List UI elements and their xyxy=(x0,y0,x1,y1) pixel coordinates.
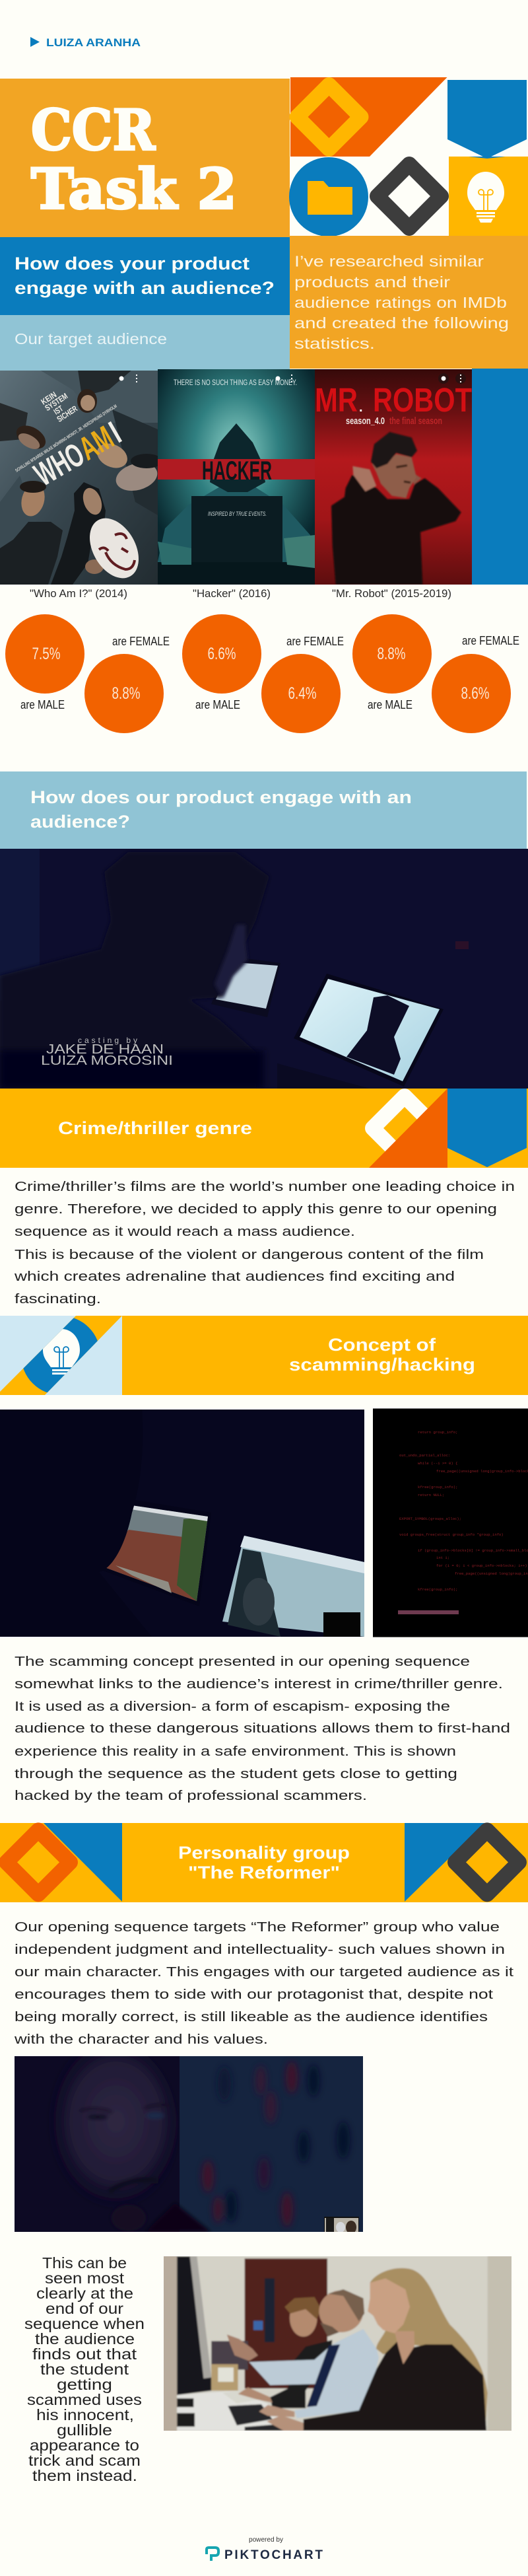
captions: "Who Am I?" (2014) xyxy=(30,587,127,600)
text block: scamming concept: through the sequence as the student gets close to getting xyxy=(15,1767,457,1781)
panel: question xyxy=(0,237,290,315)
chart: Who Am I audience ratings: 8.8% xyxy=(112,684,140,703)
poster tagline: SICHER xyxy=(55,404,79,424)
footer: Piktochart credit xyxy=(207,2536,323,2562)
captions: "Mr. Robot" (2015-2019) xyxy=(332,587,451,600)
heading: Personality group xyxy=(178,1843,350,1863)
icon: light bulb xyxy=(467,172,504,223)
text block: ending: seen most xyxy=(45,2270,125,2287)
poster title: ROBOT xyxy=(373,381,472,419)
text block: ending: This can be xyxy=(42,2254,127,2272)
text block: reformer: encourages them to side with our protagonist that, despite not xyxy=(15,1987,494,2002)
poster: Mr. Robot xyxy=(315,369,472,585)
panel: personality group banner xyxy=(0,1823,528,1902)
text block: reformer: being morally correct, is still likeable as the audience identifies xyxy=(15,2010,488,2024)
silhouette xyxy=(0,1410,152,1637)
chart: Hacker audience ratings xyxy=(182,614,344,733)
poster tagline: THERE IS NO SUCH THING AS EASY MONEY. xyxy=(174,379,297,387)
icon: blue triangle right xyxy=(405,1823,485,1902)
figure: hacker hood xyxy=(210,423,265,492)
icon: blue shield xyxy=(447,1089,527,1167)
chart: Who Am I audience ratings: 7.5% xyxy=(32,645,61,663)
keyboards xyxy=(228,2404,273,2425)
heading: audience? xyxy=(30,812,130,832)
chart: Mr. Robot audience ratings: 8.6% xyxy=(461,684,490,703)
text block: crime thriller: genre. Therefore, we decided to apply this genre to our opening xyxy=(15,1202,497,1217)
code text: kfree(group_info); xyxy=(418,1587,457,1592)
text block: crime thriller: sequence as it would reach a mass audience. xyxy=(15,1225,355,1239)
subheading: Our target audience xyxy=(15,330,167,347)
text block: ending: finds out that xyxy=(32,2345,137,2363)
poster subtitle: the final season xyxy=(389,415,442,427)
text block: ending: them instead. xyxy=(32,2467,137,2484)
credit text xyxy=(42,1037,172,1065)
text block: ending: sequence when xyxy=(24,2315,145,2332)
poster cast names: SCHILLING M'BAREK WILKE MÖHRING MONOT, JR. HERZSPRUNG DYRHOLM xyxy=(14,403,118,474)
poster tagline: KEIN xyxy=(40,390,58,407)
code text xyxy=(399,1430,528,1592)
figure: leather jacket man xyxy=(0,481,63,585)
chart: Mr. Robot audience ratings: are MALE xyxy=(368,698,412,711)
icon: Piktochart logo xyxy=(207,2548,218,2561)
poster UI dots xyxy=(438,373,466,384)
icon: orange triangle xyxy=(369,1089,447,1168)
text block: products and their xyxy=(294,273,450,291)
parcel xyxy=(211,2364,238,2390)
chart: Hacker audience ratings: 6.6% xyxy=(207,645,236,663)
cables xyxy=(211,2341,248,2370)
text block: statistics. xyxy=(294,335,375,352)
icon: white diamond xyxy=(373,1096,436,1160)
heading: Crime/thriller genre xyxy=(58,1118,252,1138)
heading: "The Reformer" xyxy=(188,1863,340,1882)
chart: Hacker audience ratings: 6.4% xyxy=(288,684,317,703)
poster title: WHO xyxy=(28,436,90,493)
code text: int i; xyxy=(436,1556,449,1560)
chart: Who Am I audience ratings xyxy=(5,614,170,733)
text block: ending xyxy=(24,2254,145,2484)
chart: Hacker audience ratings: are FEMALE xyxy=(286,635,344,648)
code text: return group_info; xyxy=(418,1430,457,1435)
poster tagline: SYSTEM xyxy=(44,392,69,413)
poster: Hacker xyxy=(158,369,315,585)
text block: crime thriller: Crime/thriller’s films are the world’s number one leading choice in xyxy=(15,1180,515,1194)
photo: screens in dark room xyxy=(0,1410,364,1637)
poster title: AM xyxy=(73,419,119,468)
text block: reformer: Our opening sequence targets “The Reformer” group who value xyxy=(15,1920,500,1935)
face xyxy=(40,2041,211,2232)
chart: Mr. Robot audience ratings: 8.8% xyxy=(378,645,405,663)
text block: reformer: with the character and his values. xyxy=(14,2032,268,2047)
poster title xyxy=(317,388,472,412)
credit text: LUIZA MOROSINI xyxy=(41,1054,173,1068)
panel: research note xyxy=(290,236,528,369)
text block: crime thriller xyxy=(14,1180,515,1306)
text block: scamming concept: The scamming concept presented in our opening sequence xyxy=(15,1655,470,1669)
man xyxy=(249,2329,379,2418)
poster UI dots xyxy=(119,375,137,382)
back laptop xyxy=(211,956,280,1017)
heading: engage with an audience? xyxy=(15,278,275,298)
title: CCR xyxy=(31,98,156,162)
chart: Mr. Robot audience ratings: are FEMALE xyxy=(462,634,519,647)
panel: crime thriller banner xyxy=(0,1089,528,1168)
chart: Who Am I audience ratings: are FEMALE xyxy=(112,635,170,648)
captions: "Hacker" (2016) xyxy=(193,587,271,600)
figure: hacker body xyxy=(158,487,310,562)
silhouette xyxy=(0,852,268,1050)
text block: ending: his innocent, xyxy=(36,2406,134,2423)
poster subtitle: season_4.0 xyxy=(346,415,385,427)
laptop screen xyxy=(222,1536,364,1637)
woman xyxy=(370,2268,488,2431)
title xyxy=(31,98,237,222)
door xyxy=(245,2258,327,2388)
icon: bulb on circle xyxy=(23,1318,98,1392)
boy xyxy=(270,2340,332,2408)
text block: reformer: our main character. This engages with our targeted audience as it xyxy=(15,1965,514,1980)
heading xyxy=(15,254,275,298)
text block: crime thriller: which creates adrenaline that audiences find exciting and xyxy=(14,1270,455,1284)
poster title: . xyxy=(359,400,363,415)
photo: man at laptops xyxy=(0,849,528,1089)
text block: ending: trick and scam xyxy=(28,2452,141,2469)
text block: scamming concept: hacked by the team of professional scammers. xyxy=(15,1789,367,1803)
panel: title xyxy=(0,79,290,237)
heading xyxy=(289,1335,475,1375)
figure: hooded man xyxy=(51,482,106,585)
text block: ending: the audience xyxy=(35,2330,135,2347)
text block: scamming concept: audience to these dangerous situations allows them to first-hand xyxy=(15,1721,510,1736)
monitor xyxy=(177,2256,211,2395)
chart: Mr. Robot audience ratings xyxy=(352,614,519,733)
panel: scamming banner xyxy=(0,1316,528,1395)
figure: man top right xyxy=(98,444,158,491)
icon: blue circle with folder xyxy=(289,157,368,236)
text block: crime thriller: This is because of the violent or dangerous content of the film xyxy=(15,1248,484,1262)
text block: ending: clearly at the xyxy=(36,2285,133,2302)
poster title: HACKER xyxy=(202,456,272,485)
heading: How does your product xyxy=(15,254,249,273)
author label: LUIZA ARANHA xyxy=(46,36,141,49)
text block: scamming concept xyxy=(15,1655,510,1803)
figure: man in hoodie xyxy=(331,432,461,585)
text block: reformer: independent judgment and intellectuality- such values shown in xyxy=(15,1943,505,1957)
icon: yellow diamond xyxy=(297,85,361,149)
poster: Who Am I xyxy=(0,370,162,587)
text block: I’ve researched similar xyxy=(294,253,484,270)
poster tagline: IST xyxy=(52,404,65,417)
text block: ending: end of our xyxy=(46,2300,123,2317)
text block: crime thriller: fascinating. xyxy=(15,1292,101,1306)
footer: Piktochart credit: PIKTOCHART xyxy=(224,2548,323,2562)
front laptop xyxy=(294,974,444,1087)
blue side block xyxy=(472,369,528,585)
text block: scamming concept: somewhat links to the audience’s interest in crime/thriller genre. xyxy=(15,1677,503,1692)
photo: scammers at computers xyxy=(162,2254,514,2433)
code text: for (i = 0; i < group_info->nblocks; i++) xyxy=(436,1563,527,1568)
code text: out_undo_partial_alloc: xyxy=(399,1453,450,1458)
inset thumbnail xyxy=(324,2217,359,2234)
text block: ending: appearance to xyxy=(30,2437,139,2454)
footer: Piktochart credit: powered by xyxy=(249,2536,284,2544)
text block: scamming concept: It is used as a diversion- a form of escapism- exposing the xyxy=(15,1699,450,1714)
heading: scamming/hacking xyxy=(289,1355,475,1375)
icon: dark diamond xyxy=(455,1830,519,1894)
icon: blue shield tip xyxy=(469,157,506,159)
icon: orange diamond xyxy=(7,1830,70,1894)
code screenshot xyxy=(373,1408,528,1637)
figure: top woman xyxy=(77,370,132,413)
text block: ending: getting xyxy=(57,2376,112,2393)
code text: EXPORT_SYMBOL(groups_alloc); xyxy=(399,1517,461,1521)
credit text: JAKE DE HAAN xyxy=(46,1042,164,1057)
curtain pattern xyxy=(202,2061,350,2227)
text block: scamming concept: experience this reality in a safe environment. This is shown xyxy=(15,1744,456,1759)
credit text: casting by xyxy=(78,1036,137,1045)
figure: mask xyxy=(85,518,139,579)
panel: target audience xyxy=(0,315,290,371)
house screen xyxy=(92,1499,211,1606)
poster title: MR xyxy=(315,381,358,419)
heading: How does our product engage with an xyxy=(30,787,412,807)
panel: section heading xyxy=(0,771,527,849)
laptop xyxy=(191,496,282,562)
code text: return NULL; xyxy=(418,1493,444,1497)
text block: ending: the student xyxy=(40,2361,129,2378)
poster tagline xyxy=(41,391,78,421)
icon: dark diamond xyxy=(378,164,441,228)
figure: left woman xyxy=(0,403,46,449)
captions xyxy=(30,587,451,600)
poster UI dots xyxy=(276,375,292,382)
text block: and created the following xyxy=(294,314,509,332)
chart: Who Am I audience ratings: are MALE xyxy=(20,698,65,711)
text block: ending: scammed uses xyxy=(27,2391,142,2408)
code text: while (--i >= 0) { xyxy=(418,1461,457,1466)
code text: kfree(group_info); xyxy=(418,1485,457,1489)
text block: ending: gullible xyxy=(57,2421,112,2439)
photo: close-up of face xyxy=(15,2041,363,2234)
laptop: INSPIRED BY TRUE EVENTS. xyxy=(208,511,267,517)
code text: void groups_free(struct group_info *group_info) xyxy=(399,1532,504,1537)
heading xyxy=(178,1843,350,1882)
poster title: I xyxy=(103,415,127,450)
poster subtitle xyxy=(346,417,442,425)
icon: blue shield xyxy=(447,80,527,159)
desk xyxy=(177,2390,306,2431)
panel: decorative icon grid xyxy=(289,77,528,236)
text block xyxy=(294,253,509,352)
icon: blue triangle left xyxy=(44,1823,122,1902)
title: Task 2 xyxy=(31,156,237,222)
heading: Concept of xyxy=(328,1335,436,1355)
heading xyxy=(30,787,412,832)
chart: Hacker audience ratings: are MALE xyxy=(195,698,240,711)
text block: reformer xyxy=(14,1920,514,2047)
text block: audience ratings on IMDb xyxy=(294,294,507,311)
